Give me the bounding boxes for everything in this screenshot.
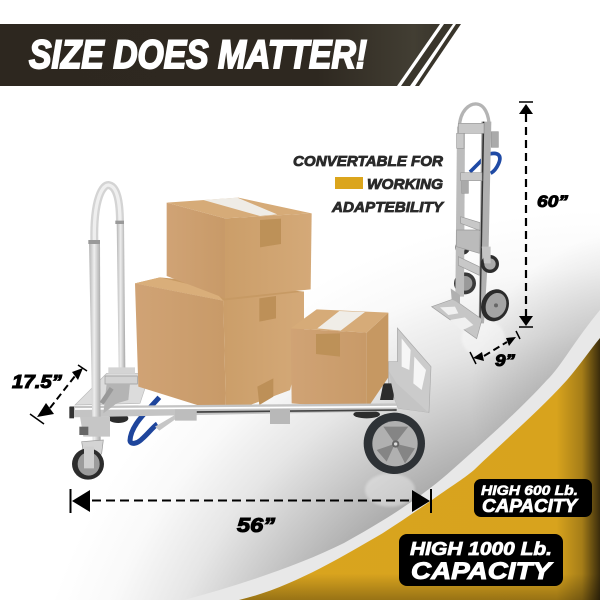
label: 9: 9” (495, 351, 516, 370)
caster wheel (72, 447, 104, 480)
handle latch (102, 367, 137, 413)
rear wheels (454, 240, 476, 294)
main wheel (364, 413, 425, 474)
blue hose handle (130, 397, 159, 443)
blue hose handle (470, 153, 500, 173)
badge: high 600 lb capacity (474, 479, 592, 517)
dimension: width 9 inches (470, 331, 520, 370)
badge line one: HIGH 600 Lb. (481, 483, 578, 498)
upright hand truck photo (432, 104, 513, 357)
flat cart photo (69, 185, 431, 507)
caster assembly (79, 417, 110, 463)
deck plate (75, 373, 150, 405)
badge line one: HIGH 1000 Lb. (410, 538, 552, 559)
line: convertable for: CONVERTABLE FOR (293, 154, 444, 170)
rear plate (388, 328, 431, 412)
floor reflection (462, 320, 505, 357)
box: top (167, 198, 312, 298)
badge line two: CAPACITY (482, 496, 579, 516)
wheel reflections (72, 473, 415, 507)
deck rail (69, 403, 397, 424)
dimension: depth 17.5 inches (12, 365, 87, 424)
main wheel (477, 285, 513, 325)
label: 56: 56” (237, 515, 275, 537)
frame rails (455, 122, 491, 323)
hose bracket (155, 415, 177, 431)
cross bars (457, 123, 498, 275)
title banner (0, 24, 461, 86)
banner shape (0, 24, 440, 86)
rear plate lower (388, 370, 428, 412)
banner stripe one (401, 24, 453, 86)
caster wheel (481, 247, 499, 273)
badge line two: CAPACITY (411, 558, 553, 585)
handle arc (459, 104, 489, 129)
gold corner panel (239, 338, 600, 600)
box: small (291, 309, 388, 409)
handle: tube (88, 185, 125, 443)
under-deck wheels (108, 383, 395, 423)
curved white band (184, 310, 600, 600)
gold swatch (335, 177, 363, 189)
title: SIZE DOES MATTER! (29, 33, 367, 77)
label: 17.5: 17.5” (12, 372, 62, 392)
dimension: length 56 inches (70, 489, 431, 537)
banner stripe two (415, 24, 461, 86)
dimension: height 60 inches (519, 102, 569, 327)
box: middle large (135, 277, 304, 414)
line: working: WORKING (367, 177, 443, 193)
side note text (293, 154, 444, 216)
label: 60: 60” (537, 192, 569, 211)
badge: high 1000 lb capacity (399, 534, 563, 586)
foot plate (432, 288, 482, 339)
line: adaptebility: ADAPTEBILITY (331, 200, 444, 216)
